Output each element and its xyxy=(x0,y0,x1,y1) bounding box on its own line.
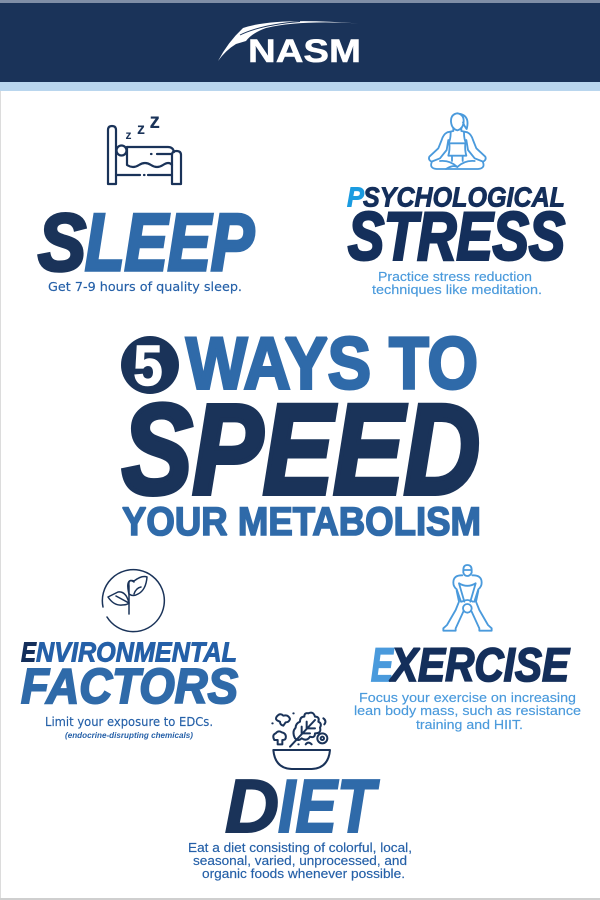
main title: SPEED xyxy=(122,378,480,522)
text: diet advice: seasonal, varied, unprocessed, and xyxy=(193,854,407,868)
text: diet advice: Eat a diet consisting of colorful, local, xyxy=(188,841,412,855)
icon: bed with sleeping zzz xyxy=(108,110,181,184)
icon: bed with sleeping zzz: z xyxy=(126,128,132,142)
heading: SLEEP: S xyxy=(38,198,86,288)
icon: salad bowl xyxy=(272,713,330,769)
text: exercise advice: lean body mass, such as resistance xyxy=(354,704,581,718)
heading: SLEEP: LEEP xyxy=(85,198,255,288)
badge: number 5 xyxy=(121,334,179,398)
heading: DIET: IET xyxy=(278,764,380,848)
icon: meditating woman xyxy=(429,113,486,169)
heading: DIET xyxy=(225,764,380,848)
text: sleep advice: Get 7-9 hours of quality sleep. xyxy=(48,279,242,294)
text: exercise advice: training and HIIT. xyxy=(416,718,523,732)
heading: PSYCHOLOGICAL STRESS: P xyxy=(347,182,364,212)
text: environmental advice: (endocrine-disrupting chemicals) xyxy=(65,731,193,740)
header banner xyxy=(0,0,600,91)
heading: ENVIRONMENTAL FACTORS xyxy=(21,636,238,714)
text: stress advice xyxy=(372,270,542,297)
text: exercise advice: Focus your exercise on increasing xyxy=(359,691,576,705)
badge: number 5: 5 xyxy=(134,334,162,398)
main title xyxy=(121,324,481,544)
logo: NASM xyxy=(218,21,361,69)
icon: man lifting kettlebell xyxy=(443,565,492,631)
text: stress advice: Practice stress reduction xyxy=(378,270,532,284)
main title: YOUR METABOLISM xyxy=(122,500,481,544)
heading: ENVIRONMENTAL FACTORS: E xyxy=(21,636,37,668)
heading: EXERCISE: E xyxy=(371,638,394,691)
icon: bed with sleeping zzz: z xyxy=(137,121,145,138)
text: exercise advice xyxy=(354,691,581,732)
text: environmental advice xyxy=(45,714,213,740)
text: environmental advice: Limit your exposure to EDCs. xyxy=(45,714,213,729)
heading: ENVIRONMENTAL FACTORS: NVIRONMENTAL xyxy=(36,636,237,668)
heading: DIET: D xyxy=(225,764,279,848)
logo: NASM: NASM xyxy=(248,33,361,69)
heading: ENVIRONMENTAL FACTORS: FACTORS xyxy=(21,660,238,714)
main title: WAYS TO xyxy=(186,324,478,404)
heading: SLEEP xyxy=(38,198,255,288)
heading: EXERCISE: XERCISE xyxy=(388,638,570,691)
icon: leaf sprout in circle xyxy=(102,570,164,632)
heading: PSYCHOLOGICAL STRESS: SYCHOLOGICAL xyxy=(363,182,565,212)
icon: bed with sleeping zzz: z xyxy=(150,110,160,133)
text: diet advice xyxy=(188,841,412,881)
text: diet advice: organic foods whenever possible. xyxy=(202,867,405,881)
text: stress advice: techniques like meditation. xyxy=(372,283,542,297)
